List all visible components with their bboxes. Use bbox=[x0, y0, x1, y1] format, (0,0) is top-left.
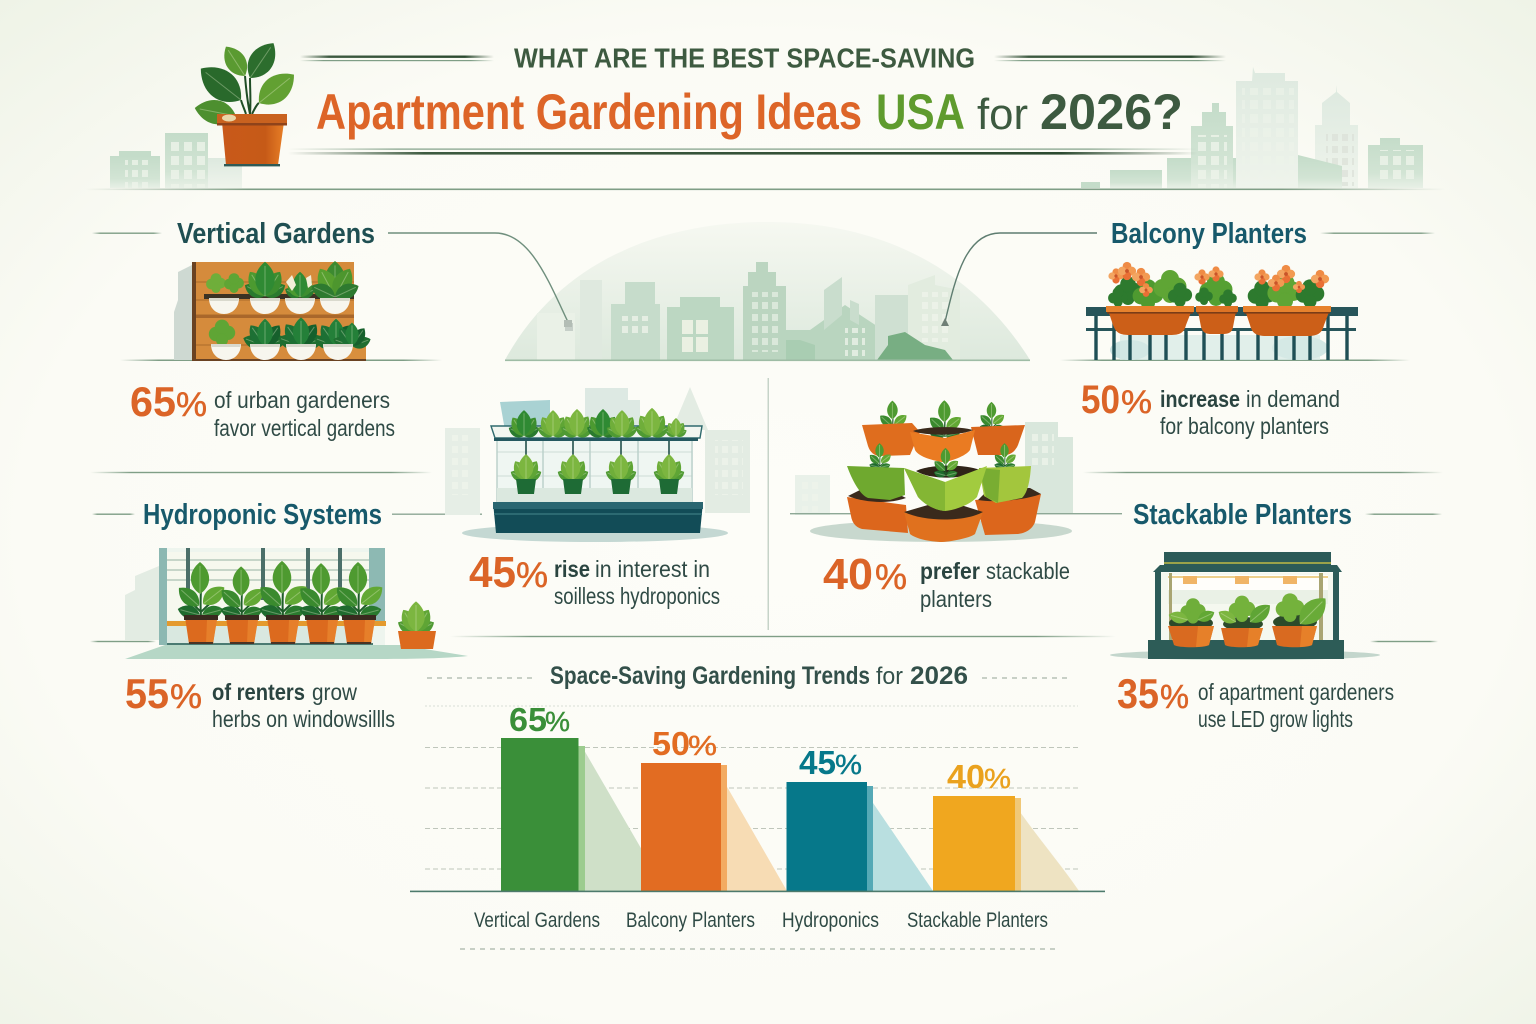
stat: 65 percent bbox=[130, 378, 395, 441]
stat: 50 percent: in demand bbox=[1246, 386, 1340, 412]
heading: Vertical Gardens bbox=[177, 218, 375, 250]
illustration: LED grow light unit bbox=[1110, 552, 1380, 660]
illustration: wall planter bbox=[120, 261, 442, 361]
stat: 45 percent: in interest in bbox=[595, 556, 710, 582]
stat: 40 percent bbox=[823, 550, 1070, 612]
heading rule bbox=[1365, 514, 1442, 515]
bar: hydroponics 45%: % bbox=[835, 749, 862, 780]
header skyline: right bbox=[1081, 67, 1423, 188]
bar: stackable planters 40%: % bbox=[984, 763, 1011, 794]
chart title: for bbox=[876, 663, 903, 690]
heading rule right bbox=[392, 514, 482, 515]
title rules bbox=[288, 56, 1226, 155]
bar: stackable planters 40%: 40 bbox=[947, 758, 985, 795]
bar: hydroponics 45%: 45 bbox=[799, 744, 836, 781]
stat: 55 percent: 55 bbox=[125, 670, 169, 717]
heading: Hydroponic Systems bbox=[143, 499, 382, 531]
stat: 45 percent: 45 bbox=[469, 548, 516, 597]
illustration: stacked pots bbox=[790, 400, 1122, 542]
heading rule left bbox=[92, 514, 135, 515]
title block bbox=[316, 42, 1183, 140]
stat: 40 percent: planters bbox=[920, 586, 992, 612]
category labels bbox=[474, 909, 1048, 932]
bar: vertical gardens 65%: 65 bbox=[509, 701, 547, 738]
stat: 35 percent: 35 bbox=[1117, 670, 1159, 717]
bar chart bbox=[410, 662, 1105, 949]
stat: 45 percent bbox=[469, 548, 720, 609]
panel: stackable planters illustration and stat bbox=[790, 400, 1122, 612]
category labels: Hydroponics bbox=[782, 909, 879, 932]
heading: Balcony Planters bbox=[1111, 218, 1307, 250]
stat: 40 percent: % bbox=[875, 558, 907, 597]
stat: 45 percent: rise bbox=[554, 556, 590, 582]
title eyebrow: WHAT ARE THE BEST SPACE-SAVING bbox=[514, 42, 975, 74]
stat: 35 percent bbox=[1117, 670, 1394, 732]
connector arrow: balcony planters to dome bbox=[941, 233, 1097, 326]
bar: hydroponics 45% bbox=[786, 744, 873, 891]
heading rule bbox=[92, 232, 162, 234]
stat: 40 percent: prefer bbox=[920, 558, 980, 584]
stat: 55 percent: grow bbox=[312, 679, 357, 705]
bar shadows bbox=[584, 750, 1079, 891]
stat: 65 percent: % bbox=[176, 386, 207, 424]
panel: soilless hydroponics unit bbox=[445, 387, 750, 609]
panel: hydroponic systems bbox=[92, 499, 482, 732]
stat: 35 percent: use LED grow lights bbox=[1198, 706, 1353, 732]
stat: 65 percent: of urban gardeners bbox=[214, 387, 390, 413]
illustration: windowsill herbs bbox=[125, 548, 468, 659]
stat: 45 percent: % bbox=[516, 556, 548, 595]
stat: 65 percent: favor vertical gardens bbox=[214, 415, 395, 441]
category labels: Vertical Gardens bbox=[474, 909, 600, 932]
bar: vertical gardens 65% bbox=[501, 701, 585, 891]
stat: 40 percent: stackable bbox=[986, 558, 1070, 584]
category labels: Balcony Planters bbox=[626, 909, 755, 932]
stat: 55 percent bbox=[125, 670, 395, 732]
header ground line bbox=[85, 188, 1445, 190]
category labels: Stackable Planters bbox=[907, 909, 1048, 932]
panel: vertical gardens bbox=[92, 218, 442, 441]
stat: 65 percent: 65 bbox=[130, 378, 176, 425]
illustration: hydroponic rack bbox=[445, 387, 750, 542]
bar: balcony planters 50%: % bbox=[688, 730, 717, 761]
stat: 55 percent: herbs on windowsillls bbox=[212, 706, 395, 732]
panel: stackable planters heading and grow light bbox=[1110, 499, 1442, 732]
panel: balcony planters bbox=[1060, 218, 1435, 439]
stat: 50 percent bbox=[1081, 378, 1340, 439]
stat: 40 percent: 40 bbox=[823, 550, 873, 599]
title main: Apartment Gardening Ideas bbox=[316, 84, 862, 140]
title USA: USA bbox=[876, 84, 965, 140]
stat: 55 percent: of renters bbox=[212, 679, 305, 705]
divider lines bbox=[90, 378, 1443, 642]
connector arrow: vertical gardens to dome bbox=[388, 233, 572, 327]
title for: for bbox=[977, 90, 1028, 139]
chart title: Space-Saving Gardening Trends bbox=[550, 662, 870, 690]
stat: 35 percent: of apartment gardeners bbox=[1198, 679, 1394, 705]
panel: central city dome bbox=[505, 222, 1030, 361]
stat: 55 percent: % bbox=[170, 678, 202, 716]
stat: 50 percent: for balcony planters bbox=[1160, 413, 1329, 439]
stat: 50 percent: 50 bbox=[1081, 378, 1120, 422]
heading: Stackable Planters bbox=[1133, 499, 1352, 531]
header skyline: left bbox=[110, 133, 242, 188]
bar: stackable planters 40% bbox=[933, 758, 1021, 891]
icon: potted plant bbox=[192, 36, 302, 166]
bar: vertical gardens 65%: % bbox=[545, 706, 570, 737]
title year: 2026? bbox=[1040, 84, 1183, 140]
heading rule bbox=[1320, 232, 1435, 234]
stat: 50 percent: % bbox=[1121, 384, 1152, 420]
bar: balcony planters 50% bbox=[641, 725, 727, 891]
illustration: balcony rail with planters bbox=[1060, 262, 1410, 361]
chart title: 2026 bbox=[910, 662, 968, 690]
stat: 35 percent: % bbox=[1160, 678, 1189, 715]
stat: 45 percent: soilless hydroponics bbox=[554, 583, 720, 609]
bar: balcony planters 50%: 50 bbox=[652, 725, 690, 762]
stat: 50 percent: increase bbox=[1160, 386, 1240, 412]
